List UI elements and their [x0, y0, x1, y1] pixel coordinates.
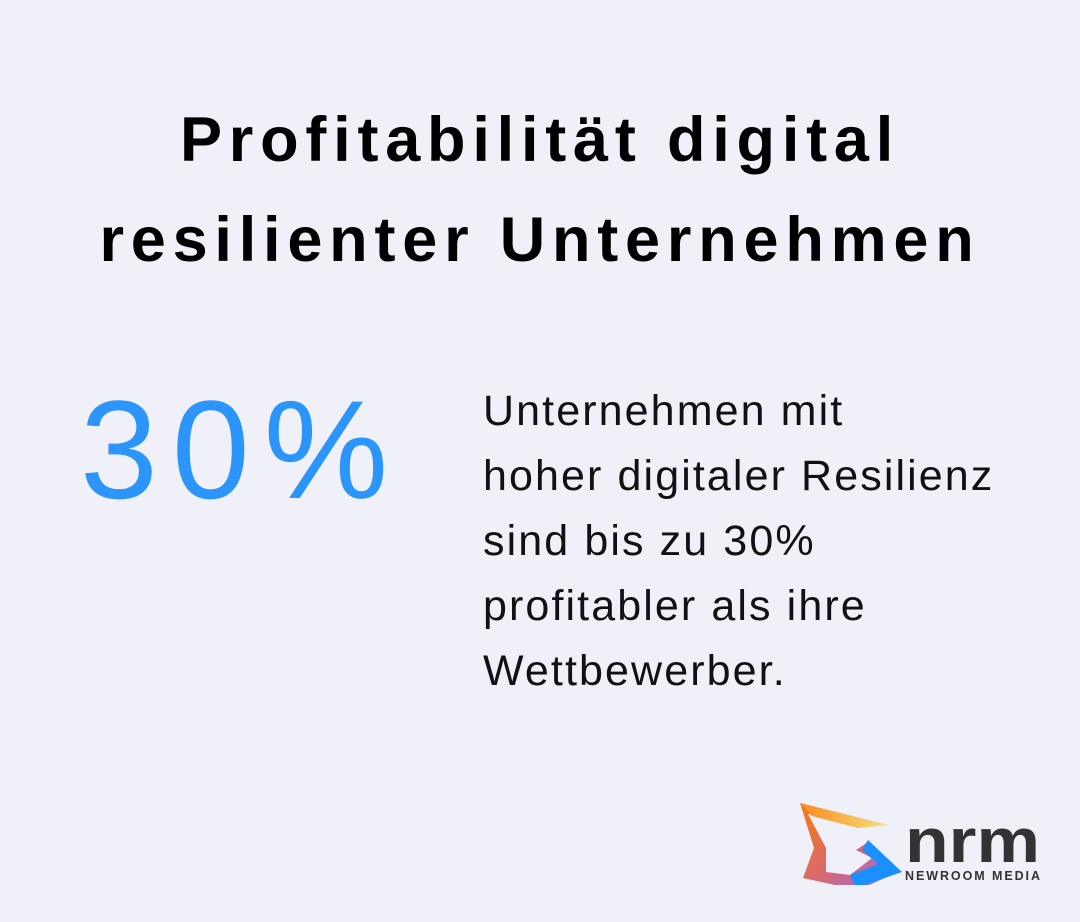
description text: hoher digitaler Resilienz [483, 452, 994, 500]
description text: Wettbewerber. [483, 647, 787, 695]
title: resilienter Unternehmen [99, 205, 981, 275]
description text [483, 387, 994, 695]
description text: Unternehmen mit [483, 387, 844, 435]
title: Profitabilität digital [180, 105, 900, 175]
logo [800, 803, 1040, 885]
title [99, 105, 981, 275]
description text: sind bis zu 30% [483, 517, 816, 565]
logo: nrm [905, 807, 1040, 876]
logo: NEWROOM MEDIA [905, 869, 1040, 883]
description text: profitabler als ihre [483, 582, 867, 630]
big stat: 30% [80, 371, 402, 528]
